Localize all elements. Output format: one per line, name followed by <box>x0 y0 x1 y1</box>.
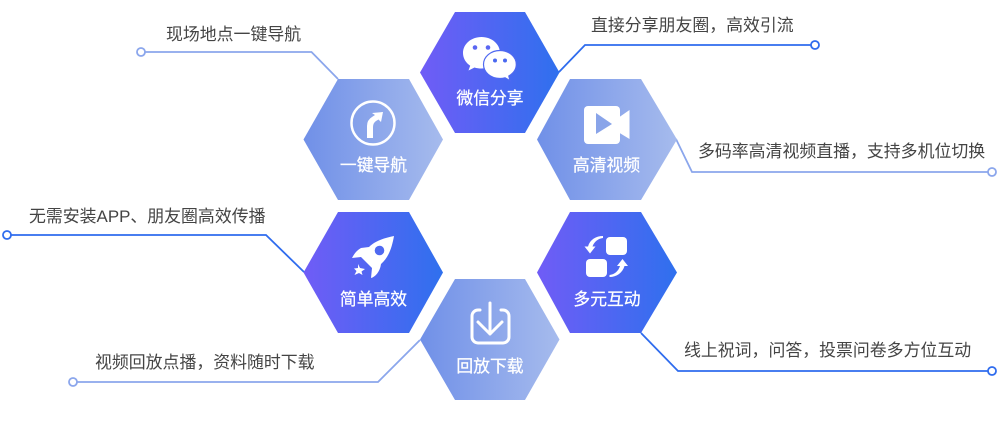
icon: video camera <box>584 106 630 144</box>
connector: HD video <box>676 139 996 176</box>
label: 简单高效 <box>340 290 407 309</box>
caption: multi interaction: 线上祝词，问答，投票问卷多方位互动 <box>684 341 971 360</box>
caption: replay download: 视频回放点播，资料随时下载 <box>95 353 315 372</box>
icon: wechat bubbles <box>463 37 516 81</box>
label: 高清视频 <box>573 156 640 175</box>
connector: navigation <box>137 48 338 79</box>
label: 一键导航 <box>340 156 407 175</box>
caption: wechat share: 直接分享朋友圈，高效引流 <box>591 16 794 35</box>
icon: turn arrow <box>352 102 394 144</box>
connector: replay download <box>69 340 420 386</box>
caption: navigation: 现场地点一键导航 <box>166 25 301 44</box>
hexagon: HD video <box>537 79 677 200</box>
hexagon: navigation <box>304 79 443 200</box>
hexagon: wechat share <box>420 12 560 133</box>
icon: exchange squares <box>584 236 628 277</box>
caption: HD video: 多码率高清视频直播，支持多机位切换 <box>698 142 985 161</box>
connector: simple and efficient <box>3 231 304 272</box>
connector: wechat share <box>559 41 819 72</box>
hexagon: replay download <box>420 279 560 400</box>
connector: multi interaction <box>641 333 996 375</box>
icon: download tray <box>472 303 509 343</box>
hexagon: simple and efficient <box>304 212 443 333</box>
hexagon: multi interaction <box>537 212 677 333</box>
icon: rocket <box>352 236 394 278</box>
label: 微信分享 <box>456 89 524 108</box>
label: 多元互动 <box>573 290 641 309</box>
caption: simple and efficient: 无需安装APP、朋友圈高效传播 <box>29 207 266 226</box>
label: 回放下载 <box>456 357 524 376</box>
